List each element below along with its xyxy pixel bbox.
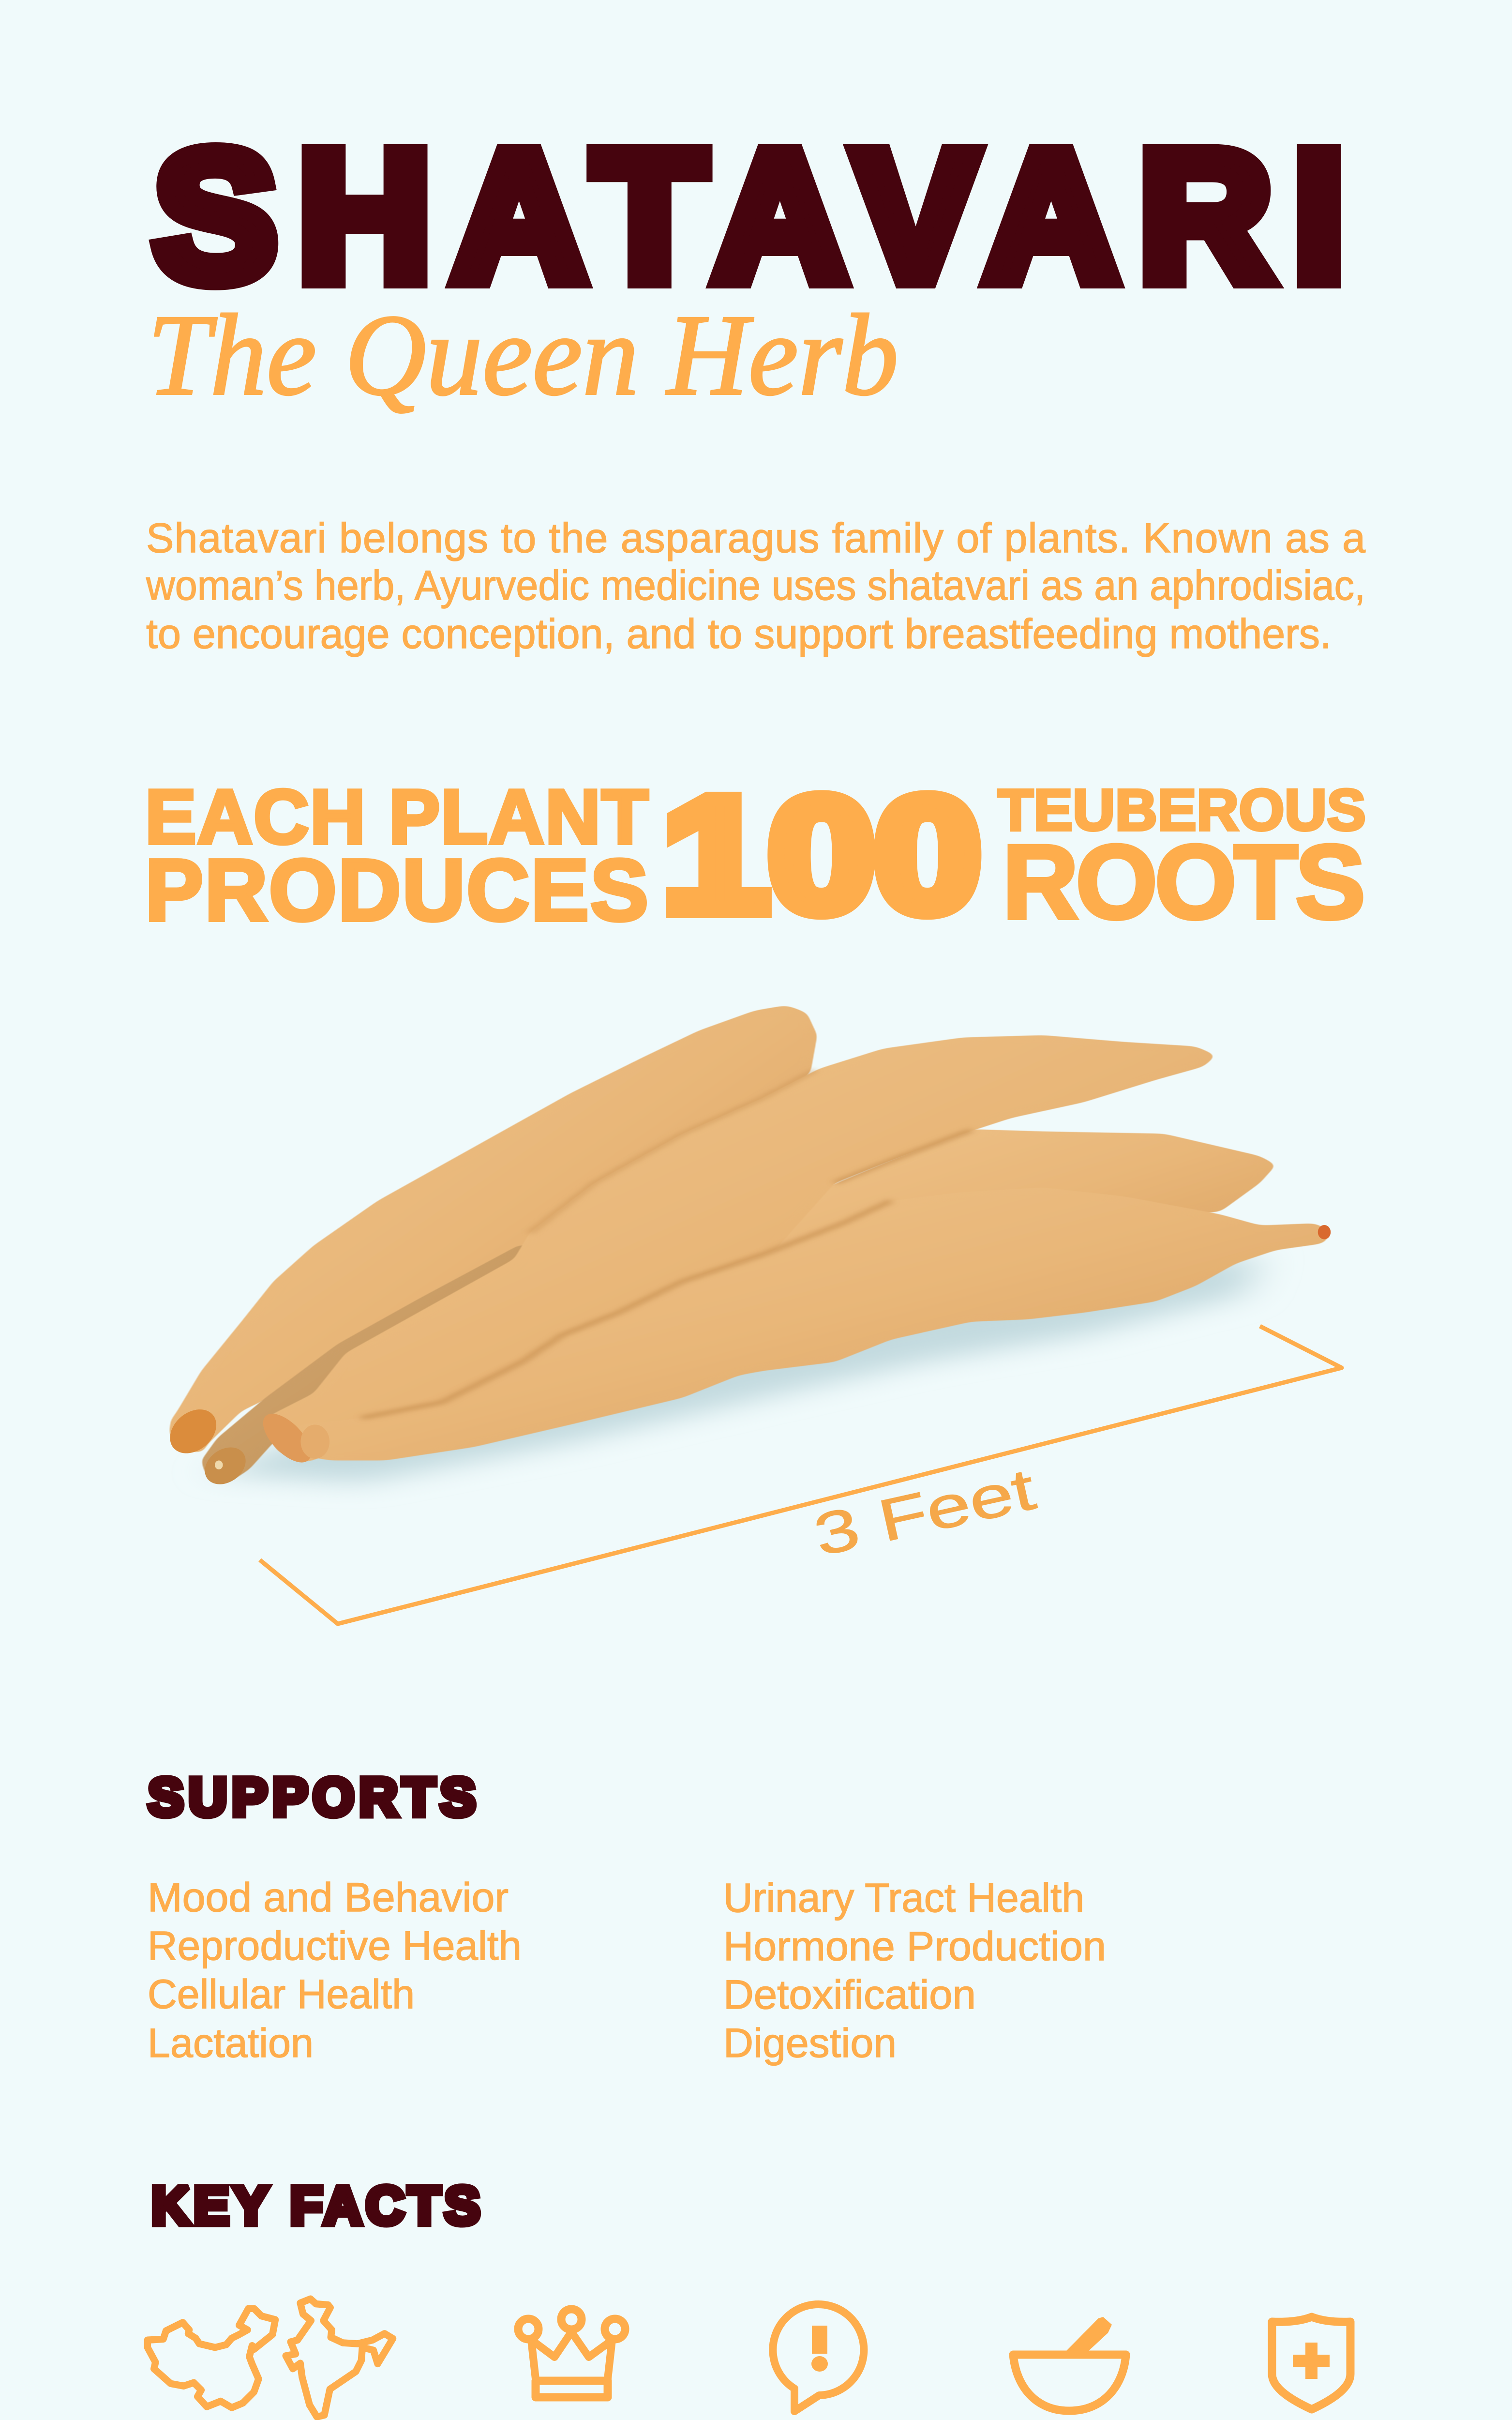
label: 3 Feet: 3 Feet xyxy=(808,1456,1041,1568)
photo: shatavari roots xyxy=(163,1005,1331,1487)
subtitle: The Queen Herb xyxy=(148,290,898,419)
list: supports right column: Digestion xyxy=(723,2020,897,2066)
heading: key facts: KEY FACTS xyxy=(151,2176,480,2236)
icon: mortar and pestle xyxy=(1013,2317,1126,2411)
list: supports left column: Cellular Health xyxy=(148,1971,415,2017)
headline: each plant produces 100 tuberous roots: ROOTS xyxy=(1003,823,1365,940)
intro paragraph xyxy=(146,515,1365,657)
list: supports left column: Lactation xyxy=(148,2020,314,2066)
icon: speech bubble with exclamation xyxy=(773,2304,864,2411)
headline: each plant produces 100 tuberous roots: 100 xyxy=(662,764,981,946)
list: supports left column: Reproductive Health xyxy=(148,1923,522,1968)
title: SHATAVARI xyxy=(154,113,1345,319)
intro paragraph: to encourage conception, and to support breastfeeding mothers. xyxy=(146,611,1332,657)
list: supports left column: Mood and Behavior xyxy=(148,1875,509,1920)
icon: shield with cross xyxy=(1272,2317,1350,2409)
intro paragraph: Shatavari belongs to the asparagus family of plants. Known as a xyxy=(146,515,1365,561)
list: supports right column xyxy=(723,1875,1106,2066)
list: supports right column: Urinary Tract Health xyxy=(723,1875,1084,1921)
heading: supports: SUPPORTS xyxy=(148,1768,476,1827)
headline: each plant produces 100 tuberous roots xyxy=(145,764,1366,946)
intro paragraph: woman’s herb, Ayurvedic medicine uses shatavari as an aphrodisiac, xyxy=(146,562,1365,609)
list: supports right column: Hormone Production xyxy=(723,1923,1106,1969)
headline: each plant produces 100 tuberous roots: EACH PLANT xyxy=(145,774,648,860)
headline: each plant produces 100 tuberous roots: TEUBEROUS xyxy=(998,777,1366,843)
bracket: length dimension xyxy=(260,1326,1342,1624)
headline: each plant produces 100 tuberous roots: PRODUCES xyxy=(145,842,648,939)
icon: China and India maps xyxy=(148,2299,393,2417)
icon: crown xyxy=(518,2309,625,2397)
list: supports right column: Detoxification xyxy=(723,1972,976,2017)
list: supports left column xyxy=(148,1875,522,2066)
